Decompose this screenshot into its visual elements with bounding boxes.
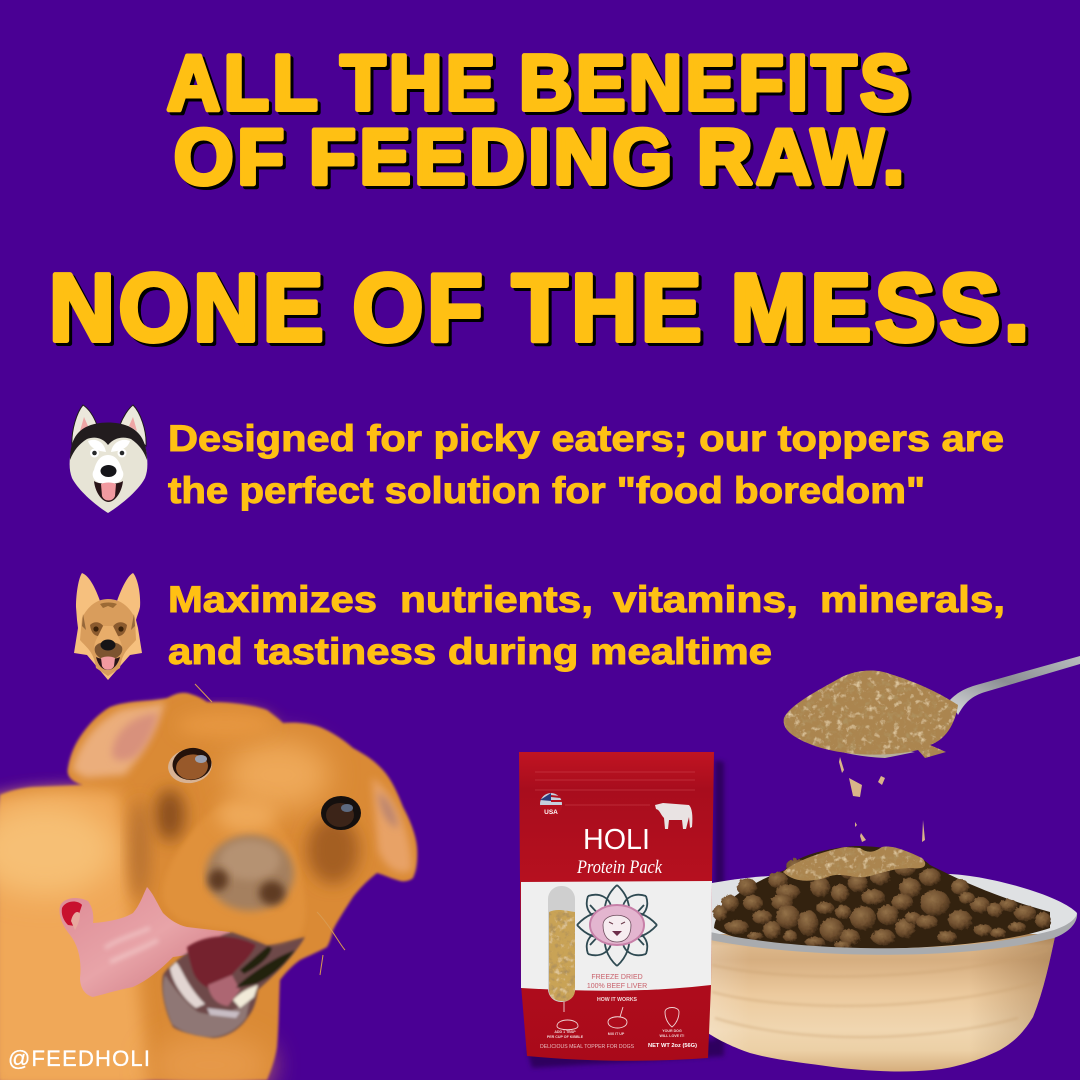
bag shadow	[527, 760, 724, 1068]
forehead highlights and shading	[226, 741, 330, 809]
powder window	[548, 886, 575, 1002]
left eye	[168, 748, 212, 784]
powder on kibble	[783, 847, 925, 881]
benefit text: nutrients: minerals,	[820, 579, 1005, 620]
bag footer	[540, 1043, 697, 1050]
whiskers	[195, 684, 345, 975]
how it works captions: WILL LOVE IT!	[660, 1034, 684, 1038]
usa flag badge: USA	[544, 809, 558, 816]
food bowl with kibble	[708, 846, 1077, 1071]
falling powder	[839, 757, 925, 842]
left ear	[72, 702, 165, 778]
product descriptor: 100% BEEF LIVER	[587, 983, 647, 990]
gums and dark lip	[236, 946, 295, 988]
icon: german shepherd dog face	[74, 573, 142, 680]
body light fur	[0, 790, 150, 1080]
benefit text: nutrients	[168, 579, 1005, 672]
benefit text: picky eaters: Designed for picky eaters; our toppers are	[168, 418, 1004, 459]
bag footer: DELICIOUS MEAL TOPPER FOR DOGS	[540, 1044, 634, 1050]
heading: none of the mess: NONE OF THE MESS.	[49, 254, 1033, 362]
title: all the benefits of feeding raw: ALL THE BENEFITS	[167, 38, 913, 126]
bag footer: NET WT 2oz (56G)	[648, 1043, 697, 1049]
bag body	[519, 752, 714, 1061]
mouth	[162, 932, 305, 1038]
photo: happy dog with tongue out	[0, 684, 417, 1080]
how it works icons	[557, 1002, 679, 1030]
how it works captions	[547, 1029, 684, 1039]
spoon with powder	[784, 656, 1080, 842]
title: all the benefits of feeding raw	[167, 38, 913, 200]
how it works captions: PER CUP OF KIBBLE	[547, 1035, 584, 1039]
mandala logo	[577, 885, 657, 966]
benefit text: nutrients: and tastiness during mealtime	[168, 631, 772, 672]
right ear	[372, 778, 412, 873]
how it works captions: MIX IT UP	[608, 1032, 625, 1036]
right eye	[321, 796, 361, 830]
spoon handle	[950, 656, 1080, 715]
icon: husky dog face	[70, 405, 147, 513]
white label band	[521, 881, 712, 991]
benefit text: nutrients: nutrients,	[400, 579, 593, 620]
cow icon	[655, 803, 692, 829]
tongue	[59, 887, 230, 997]
powder heap	[784, 671, 958, 758]
open mouth interior	[162, 932, 305, 1038]
how it works captions: ADD 1 TBSP	[554, 1030, 576, 1034]
title: all the benefits of feeding raw: OF FEEDING RAW.	[174, 112, 908, 200]
bowl body	[708, 932, 1056, 1071]
benefit text: picky eaters: the perfect solution for "food boredom"	[168, 470, 925, 511]
logo dog face	[590, 905, 644, 945]
handle watermark: @FEEDHOLI	[8, 1046, 150, 1071]
bowl rim front	[710, 913, 1077, 955]
benefit text: nutrients: Maximizes	[168, 579, 377, 620]
brand name: HOLI	[583, 824, 650, 856]
dog silhouette: head and body	[0, 693, 417, 1080]
how it works: HOW IT WORKS	[597, 997, 638, 1003]
product descriptor: FREEZE DRIED	[591, 974, 643, 981]
product descriptor	[587, 974, 647, 990]
kibble pile	[714, 846, 1050, 949]
bowl rim back	[711, 874, 1077, 934]
muzzle	[180, 828, 298, 947]
how it works captions: YOUR DOG	[662, 1029, 682, 1033]
usa flag badge	[540, 793, 562, 816]
nose	[206, 835, 294, 911]
benefit text: picky eaters	[168, 418, 1004, 511]
product bag: holi protein pack	[519, 752, 714, 1061]
product script name: Protein Pack	[576, 857, 662, 878]
lower lip and teeth	[163, 975, 250, 1037]
spoon bowl edge	[790, 728, 915, 758]
benefit text: nutrients: vitamins,	[613, 579, 798, 620]
